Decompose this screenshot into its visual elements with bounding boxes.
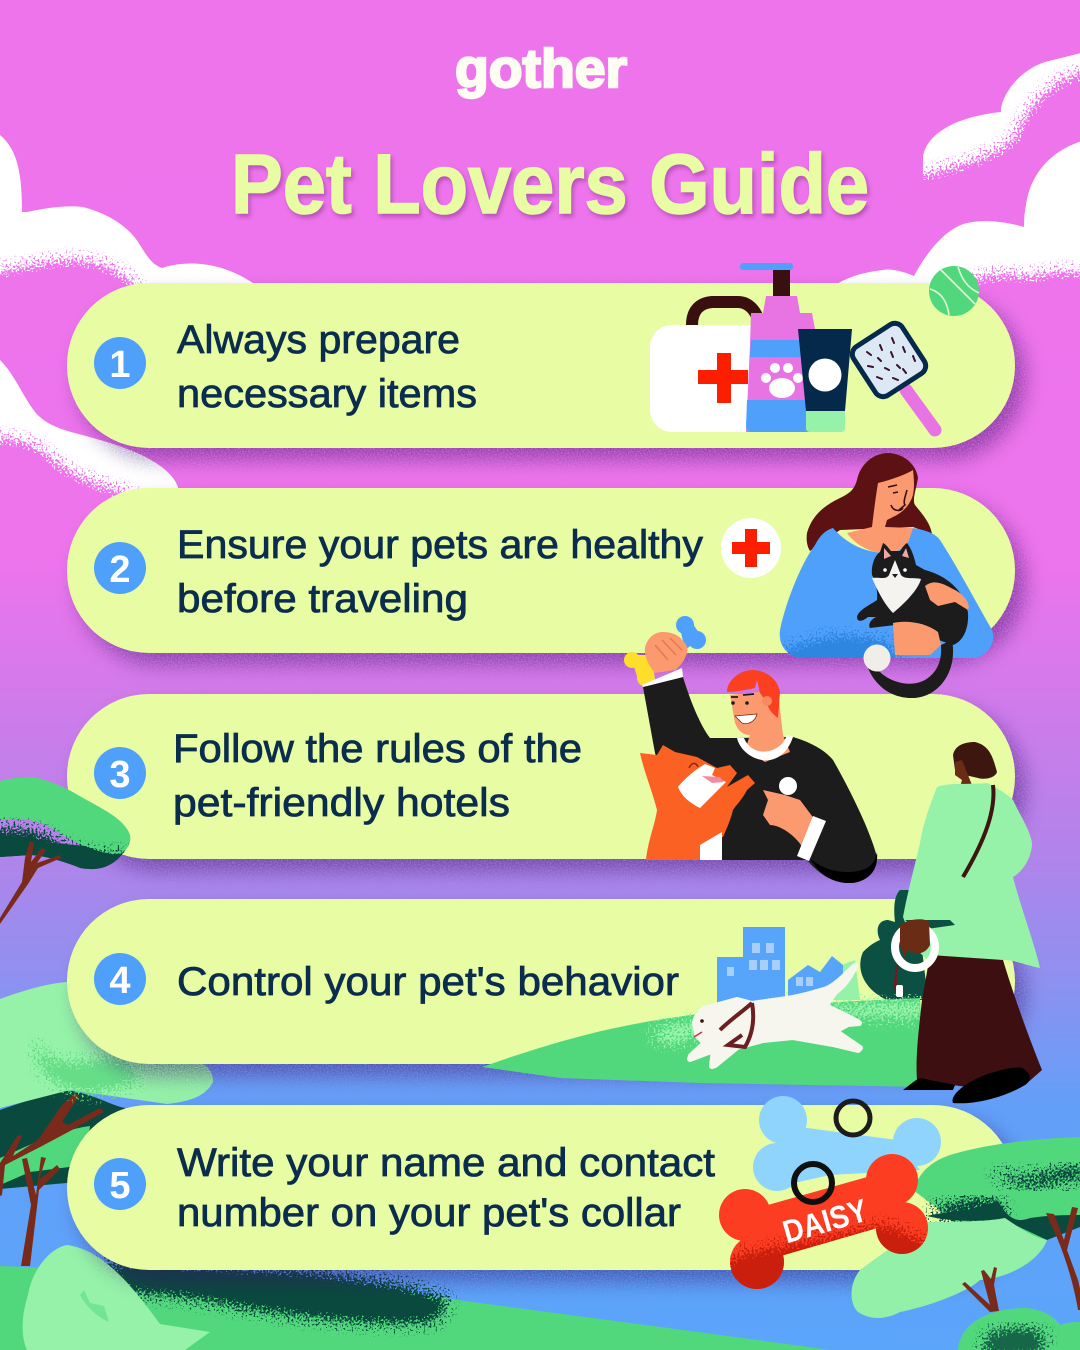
text: step 3: Follow the rules of the: [173, 727, 582, 771]
panel: step 5: [67, 1105, 1015, 1270]
cloud: right: [837, 140, 1080, 340]
number badge 5: 5: [109, 1165, 131, 1207]
ground: bottom left: [0, 1245, 830, 1350]
cloud: top left: [0, 135, 253, 340]
title: Pet Lovers Guide: [231, 137, 869, 231]
illustration: woman holding cat: [780, 453, 993, 698]
text: step 3: [173, 727, 582, 825]
number badge 4: 4: [109, 960, 131, 1002]
number badge 2: [94, 542, 146, 594]
dog: orange corgi: [640, 745, 755, 860]
icon: paw: [761, 363, 803, 398]
icon: red cross badge: [721, 518, 781, 578]
icon: buildings: [717, 927, 843, 1007]
tree: left top: [0, 777, 130, 924]
text: step 5: Write your name and contact: [177, 1141, 715, 1185]
number badge 5: [94, 1158, 146, 1210]
text: step 5: [177, 1141, 715, 1235]
number badge 3: [94, 747, 146, 799]
logo: gother: gother: [455, 39, 627, 99]
text: step 1: Always prepare: [177, 318, 460, 362]
cat: [857, 543, 969, 698]
icon: first aid kit: [650, 302, 775, 432]
tree: right: [852, 1137, 1080, 1350]
text: step 2: before traveling: [177, 577, 468, 621]
number badge 1: [94, 337, 146, 389]
text: step 5: number on your pet's collar: [177, 1191, 681, 1235]
text: step 2: Ensure your pets are healthy: [177, 523, 703, 567]
icon: tube: [798, 329, 852, 432]
illustration: man with bone and dog: [624, 616, 877, 883]
light blue bone: [753, 1096, 941, 1191]
number badge 2: 2: [109, 549, 131, 591]
icon: bone in fist: [624, 616, 706, 687]
tree: left trunk small: [21, 1157, 60, 1266]
icon: grooming brush: [849, 320, 935, 430]
panel: step 1: [67, 283, 1015, 448]
number badge 1: 1: [109, 344, 131, 386]
number badge 4: [94, 953, 146, 1005]
text: DAISY: DAISY: [779, 1192, 871, 1250]
icon: pump bottle: [740, 263, 818, 432]
pill shadows: [77, 295, 1025, 1282]
text: step 3: pet-friendly hotels: [173, 781, 510, 825]
illustration: white running dog: [690, 966, 860, 1066]
icon: tennis ball: [929, 266, 979, 316]
number badge 3: 3: [109, 754, 131, 796]
illustration: hill and town: [482, 890, 928, 1087]
cloud: mid left: [0, 360, 178, 560]
panel: step 3: [67, 694, 1015, 859]
text: step 1: necessary items: [177, 372, 477, 416]
text: step 4: Control your pet's behavior: [177, 960, 679, 1004]
panel: step 4: [67, 899, 1015, 1064]
cloud: top right: [915, 52, 1080, 210]
tree: left, large light green: [0, 982, 213, 1196]
woman face details: [888, 485, 907, 510]
red bone: [719, 1154, 928, 1289]
text: step 1: [177, 318, 477, 416]
illustration: woman walking: [895, 742, 1042, 1103]
panel: step 2: [67, 488, 1015, 653]
icon: bone tags: [719, 1096, 941, 1300]
text: step 2: [177, 523, 703, 621]
